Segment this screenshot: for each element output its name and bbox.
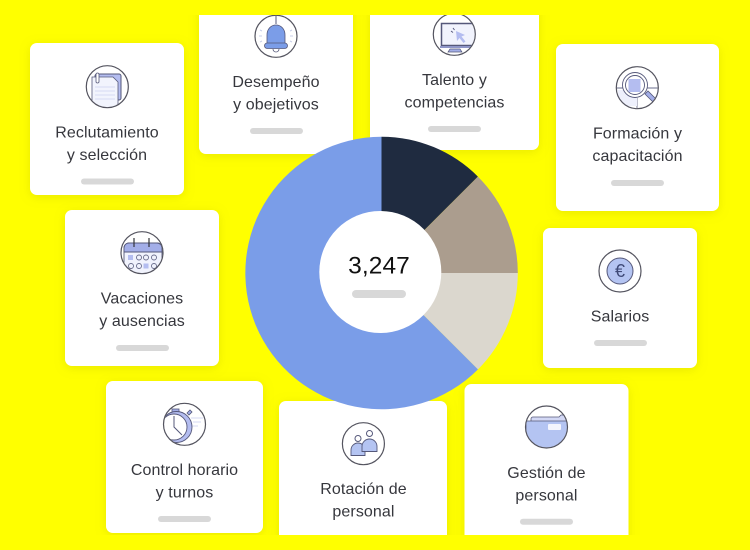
card: Rotación de personal xyxy=(279,401,447,550)
label line 2: personal xyxy=(332,504,395,520)
card: Reclutamiento y selección xyxy=(30,43,184,195)
placeholder bar xyxy=(250,128,303,134)
label line 2: y turnos xyxy=(156,484,213,502)
icon: euro coin xyxy=(599,250,641,292)
placeholder bar xyxy=(116,345,169,351)
donut centre xyxy=(319,211,441,333)
icon: folder xyxy=(526,406,568,451)
label: Vacaciones xyxy=(101,290,183,308)
label line 2: personal xyxy=(515,488,578,504)
segment: navy xyxy=(382,137,478,273)
placeholder bar xyxy=(611,180,664,186)
placeholder bar xyxy=(594,340,647,346)
card: Vacaciones y ausencias xyxy=(65,210,219,366)
card: Desempeño y obejetivos xyxy=(199,5,353,154)
label: Formación y xyxy=(593,126,682,142)
label: Gestión de xyxy=(507,465,586,482)
card: Gestión de personal xyxy=(464,384,628,550)
icon: people xyxy=(342,423,384,465)
placeholder bar xyxy=(428,126,481,132)
icon: euro coin: € xyxy=(615,261,625,281)
label: Rotación de xyxy=(320,481,407,498)
card: Salarios xyxy=(543,228,697,368)
label line 2: y ausencias xyxy=(99,313,185,330)
segment: light beige xyxy=(382,273,518,369)
icon: stopwatch xyxy=(161,403,206,445)
label: Control horario xyxy=(131,462,238,479)
label line 2: y selección xyxy=(67,147,147,164)
card: Talento y competencias xyxy=(370,5,539,150)
card: Control horario y turnos xyxy=(106,381,263,533)
icon: calendar xyxy=(121,232,163,277)
segment: blue xyxy=(245,137,478,409)
label: Salarios xyxy=(591,308,649,326)
placeholder bar xyxy=(158,516,211,522)
total value: 3,247 xyxy=(348,252,410,280)
icon: documents xyxy=(86,66,128,108)
icon: bell xyxy=(255,15,297,57)
placeholder bar xyxy=(520,519,573,525)
icon: magnifier xyxy=(616,67,659,110)
placeholder bar xyxy=(352,290,406,298)
label: Talento y xyxy=(422,72,487,89)
label: Reclutamiento xyxy=(55,124,159,142)
placeholder bar xyxy=(81,178,134,184)
label: Desempeño xyxy=(232,74,320,91)
donut chart xyxy=(245,137,518,409)
card: Formación y capacitación xyxy=(556,44,719,211)
label line 2: y obejetivos xyxy=(233,96,319,114)
label line 2: capacitación xyxy=(592,148,683,165)
icon: monitor with cursor xyxy=(433,13,478,55)
segment: taupe xyxy=(382,177,518,273)
label line 2: competencias xyxy=(405,94,504,112)
